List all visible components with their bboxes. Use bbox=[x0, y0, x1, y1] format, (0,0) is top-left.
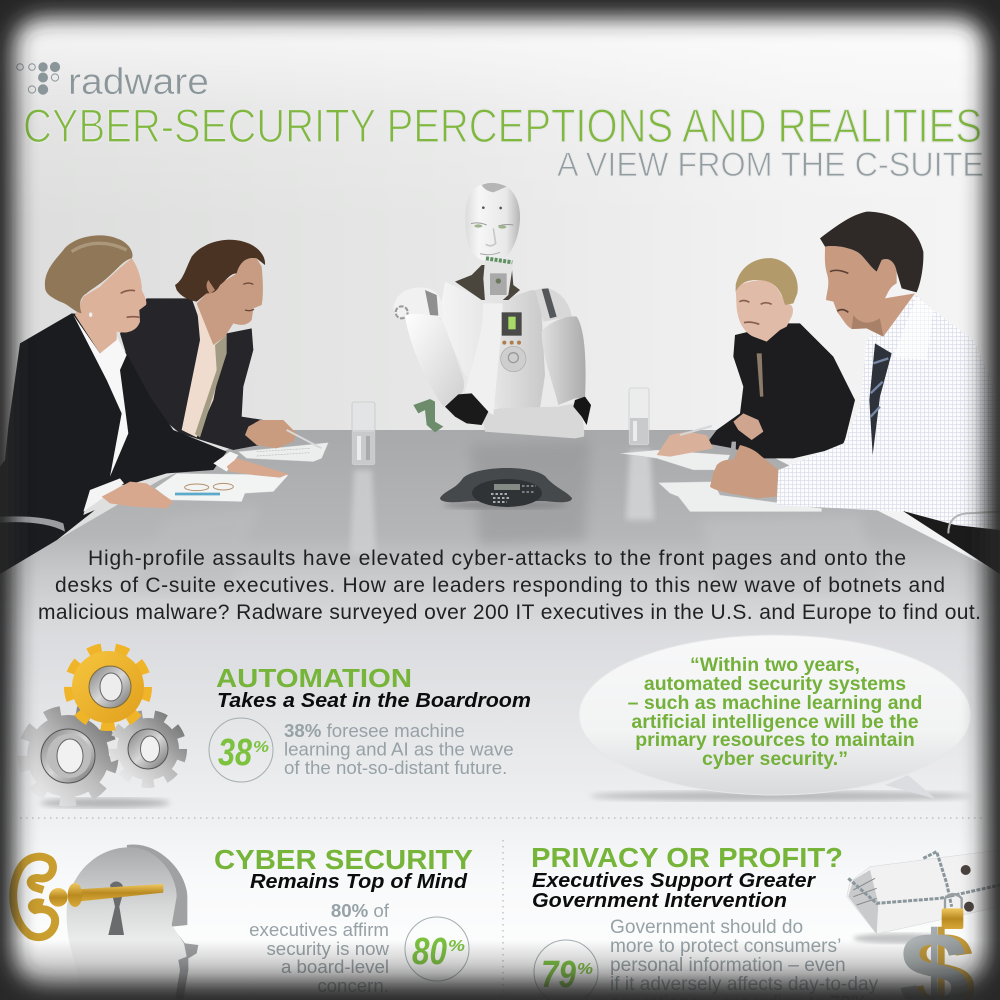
man's head bbox=[175, 240, 265, 345]
gold gear bbox=[71, 650, 145, 724]
binder bbox=[847, 850, 1000, 943]
body text: personal information – even bbox=[610, 955, 846, 976]
body text: concern. bbox=[317, 975, 389, 996]
conference phone bbox=[440, 468, 572, 509]
stat circle 38%: % bbox=[253, 739, 269, 756]
body text bbox=[610, 917, 879, 1000]
icon: gears bbox=[26, 650, 180, 808]
speech bubble quote: primary resources to maintain bbox=[635, 729, 915, 751]
body text: learning and AI as the wave bbox=[284, 738, 514, 760]
subheading: Takes a Seat in the Boardroom bbox=[217, 689, 531, 712]
logo dots bbox=[17, 62, 60, 94]
robot left shoulder bbox=[393, 287, 444, 318]
man's checked shirt bbox=[777, 295, 1000, 530]
subheading: Executives Support Greater bbox=[532, 869, 816, 892]
robot at the head of the table bbox=[393, 182, 591, 438]
horizontal dotted divider bbox=[20, 817, 985, 819]
padlock bbox=[942, 894, 963, 929]
stat circle 80% bbox=[405, 917, 469, 981]
intro paragraph bbox=[38, 547, 981, 624]
logo: radware bbox=[17, 61, 209, 102]
body text: executives affirm bbox=[249, 919, 389, 940]
section: automation bbox=[209, 665, 531, 782]
man's hand and pen bbox=[245, 420, 322, 448]
body text: if it adversely affects day-to-day bbox=[610, 974, 879, 995]
intro paragraph: malicious malware? Radware surveyed over 200 IT executives in the U.S. and Europe to find out. bbox=[38, 601, 981, 624]
woman's face and hair bbox=[736, 258, 798, 342]
subtitle: A VIEW FROM THE C-SUITE bbox=[557, 146, 984, 184]
woman's hand and pen bbox=[657, 413, 763, 457]
right steel gear bbox=[116, 717, 180, 781]
robot neck mechanics bbox=[455, 265, 520, 300]
executives: woman and man on the left bbox=[0, 235, 328, 574]
man's trousers and chair bbox=[903, 511, 1000, 574]
subheading: Government Intervention bbox=[532, 889, 787, 912]
body text: security is now bbox=[266, 938, 390, 959]
speech bubble quote: cyber security.” bbox=[702, 748, 848, 770]
man's tie bbox=[195, 335, 227, 437]
man's tie bbox=[869, 343, 892, 455]
stat circle 80%: % bbox=[448, 938, 465, 955]
stat circle 79%: 79 bbox=[541, 954, 576, 996]
speech bubble quote: – such as machine learning and bbox=[628, 692, 922, 714]
body text: Government should do bbox=[610, 917, 803, 938]
woman's cuffs bbox=[83, 452, 238, 512]
man's jacket bbox=[120, 298, 263, 450]
body text bbox=[284, 720, 514, 778]
robot right upper arm bbox=[542, 316, 586, 405]
body text: more to protect consumers’ bbox=[610, 936, 841, 957]
body text: of the not-so-distant future. bbox=[284, 757, 507, 778]
conference table bbox=[0, 430, 1000, 640]
woman's jacket bbox=[707, 323, 855, 458]
logo wordmark: radware bbox=[68, 61, 209, 102]
woman's white shirt bbox=[73, 315, 128, 477]
man's head bbox=[820, 212, 923, 337]
woman's chair bbox=[0, 516, 65, 532]
heading: AUTOMATION bbox=[216, 665, 412, 693]
heading: PRIVACY OR PROFIT? bbox=[531, 842, 843, 873]
subheading: Remains Top of Mind bbox=[250, 870, 467, 893]
stat circle 79%: % bbox=[577, 961, 593, 978]
robot head bbox=[465, 182, 520, 262]
body text: 38% foresee machine bbox=[284, 720, 465, 741]
intro paragraph: desks of C-suite executives. How are leaders responding to this new wave of botnets and bbox=[55, 574, 945, 597]
lower document with glasses and pen bbox=[155, 473, 288, 502]
body text: a board-level bbox=[281, 956, 389, 977]
golden key bbox=[13, 857, 163, 937]
subheading bbox=[532, 869, 816, 912]
speech bubble quote: automated security systems bbox=[644, 673, 906, 695]
robot forearm propping chin bbox=[465, 303, 503, 415]
speech bubble quote: artificial intelligence will be the bbox=[631, 711, 919, 733]
speech bubble quote bbox=[579, 635, 971, 801]
intro paragraph: High-profile assaults have elevated cyber-attacks to the front pages and onto the bbox=[88, 547, 906, 570]
woman's jacket bbox=[0, 313, 227, 574]
executives: woman and man on the right bbox=[620, 212, 1000, 574]
robot chest panel bbox=[501, 312, 526, 372]
stat circle 38%: 38 bbox=[218, 732, 253, 774]
robot lower forearm on table bbox=[482, 403, 584, 438]
speech bubble quote: “Within two years, bbox=[690, 654, 860, 676]
icon: head with key bbox=[13, 844, 198, 1000]
robot black right hand bbox=[573, 397, 591, 425]
man's hands and pen bbox=[710, 442, 778, 498]
icon: chained binder with dollar sign bbox=[847, 850, 1000, 1000]
section: cyber security bbox=[214, 844, 473, 996]
robot hand at chin bbox=[483, 258, 513, 301]
woman's hands bbox=[102, 458, 288, 508]
stat circle 79% bbox=[534, 940, 598, 1000]
chain bbox=[848, 852, 1000, 907]
woman's scarf bbox=[757, 353, 763, 397]
robot torso bbox=[442, 282, 545, 408]
heading: CYBER SECURITY bbox=[214, 844, 473, 875]
woman's neck and face bbox=[45, 235, 146, 353]
stat circle 38% bbox=[209, 718, 273, 782]
section: privacy or profit bbox=[531, 842, 879, 1000]
water glass right bbox=[629, 388, 649, 445]
water glass left bbox=[352, 402, 375, 465]
body text: 80% of bbox=[331, 900, 390, 921]
silver head silhouette bbox=[67, 844, 198, 1000]
man's shirt bbox=[182, 303, 227, 437]
left steel gear bbox=[26, 714, 110, 798]
robot right shoulder bbox=[535, 288, 572, 322]
papers under man's hand bbox=[238, 443, 328, 462]
robot left upper arm bbox=[405, 314, 464, 407]
body text bbox=[249, 900, 390, 996]
robot black wrist joint bbox=[445, 393, 488, 425]
papers bbox=[620, 450, 822, 512]
stat circle 80%: 80 bbox=[412, 931, 447, 973]
robot green fingers bbox=[413, 399, 443, 432]
